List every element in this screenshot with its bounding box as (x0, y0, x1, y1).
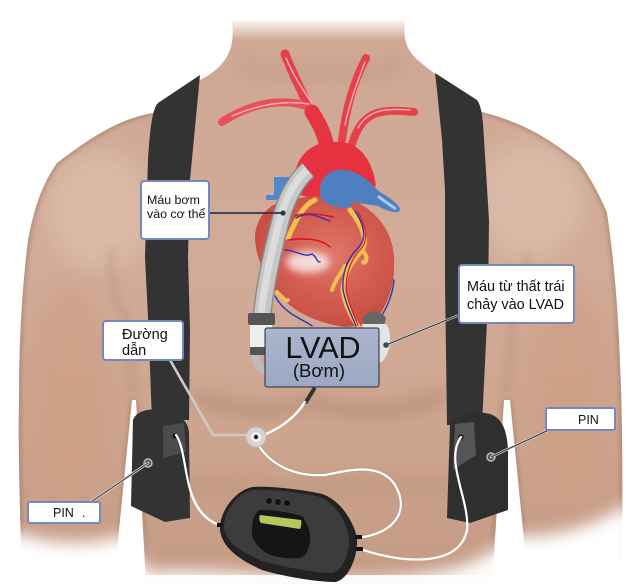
callout: left battery: PIN (53, 506, 74, 520)
skin exit site (246, 427, 266, 447)
LVAD pump box: (Bơm) (293, 360, 345, 381)
left battery (131, 409, 190, 522)
inner arm gap edge shading (118, 400, 524, 560)
armpit creases (111, 247, 134, 395)
shoulder highlights (48, 153, 144, 266)
neck shadow (238, 65, 402, 75)
controller (217, 487, 363, 582)
arteries (222, 54, 414, 148)
inflow connector (362, 311, 390, 362)
callout: left battery: . (82, 506, 85, 520)
controller display (259, 515, 301, 529)
coronary fat and vessels (275, 200, 394, 326)
callout: blood pumped to body (141, 181, 209, 239)
callout: driveline: Đường (122, 327, 168, 343)
LVAD pump box: LVAD (285, 331, 361, 365)
callout: blood from left ventricle: Máu từ thất trái (467, 279, 565, 295)
controller buttons (266, 498, 290, 506)
controller ports (217, 523, 363, 551)
pulmonary artery (320, 170, 400, 212)
driveline cables (176, 389, 467, 560)
callout: driveline: dẫn (122, 342, 146, 359)
callout: driveline (103, 321, 183, 360)
chest shadow (195, 395, 445, 411)
heart muscle (255, 196, 394, 327)
callout: right battery (546, 408, 615, 430)
heart illustration (222, 54, 414, 372)
cable over left battery (176, 435, 219, 525)
right battery (447, 412, 508, 523)
callout: blood pumped to body: Máu bơm (147, 193, 200, 207)
callout: right battery: PIN (578, 413, 599, 427)
graft connector (248, 313, 275, 372)
controller screen recess (252, 510, 310, 558)
left battery marker (144, 459, 152, 467)
cable over right battery (455, 437, 467, 530)
aortic arch (295, 142, 376, 205)
right shoulder strap (435, 73, 489, 425)
left shoulder strap (145, 75, 200, 420)
callout: blood from left ventricle: chảy vào LVAD (467, 297, 564, 313)
superior vena cava (266, 177, 293, 200)
lower body shadow (170, 480, 470, 490)
callout: left battery (28, 502, 100, 523)
LVAD pump box (265, 328, 379, 387)
callout: blood pumped to body: vào cơ thể (147, 207, 206, 221)
heart highlight (286, 251, 330, 273)
leader lines (91, 210, 551, 502)
LVAD outflow graft (261, 170, 308, 316)
outer arm edge shading (19, 113, 153, 535)
callout: blood from left ventricle (459, 265, 574, 323)
arm warm tones (40, 296, 99, 406)
right battery marker (487, 453, 495, 461)
